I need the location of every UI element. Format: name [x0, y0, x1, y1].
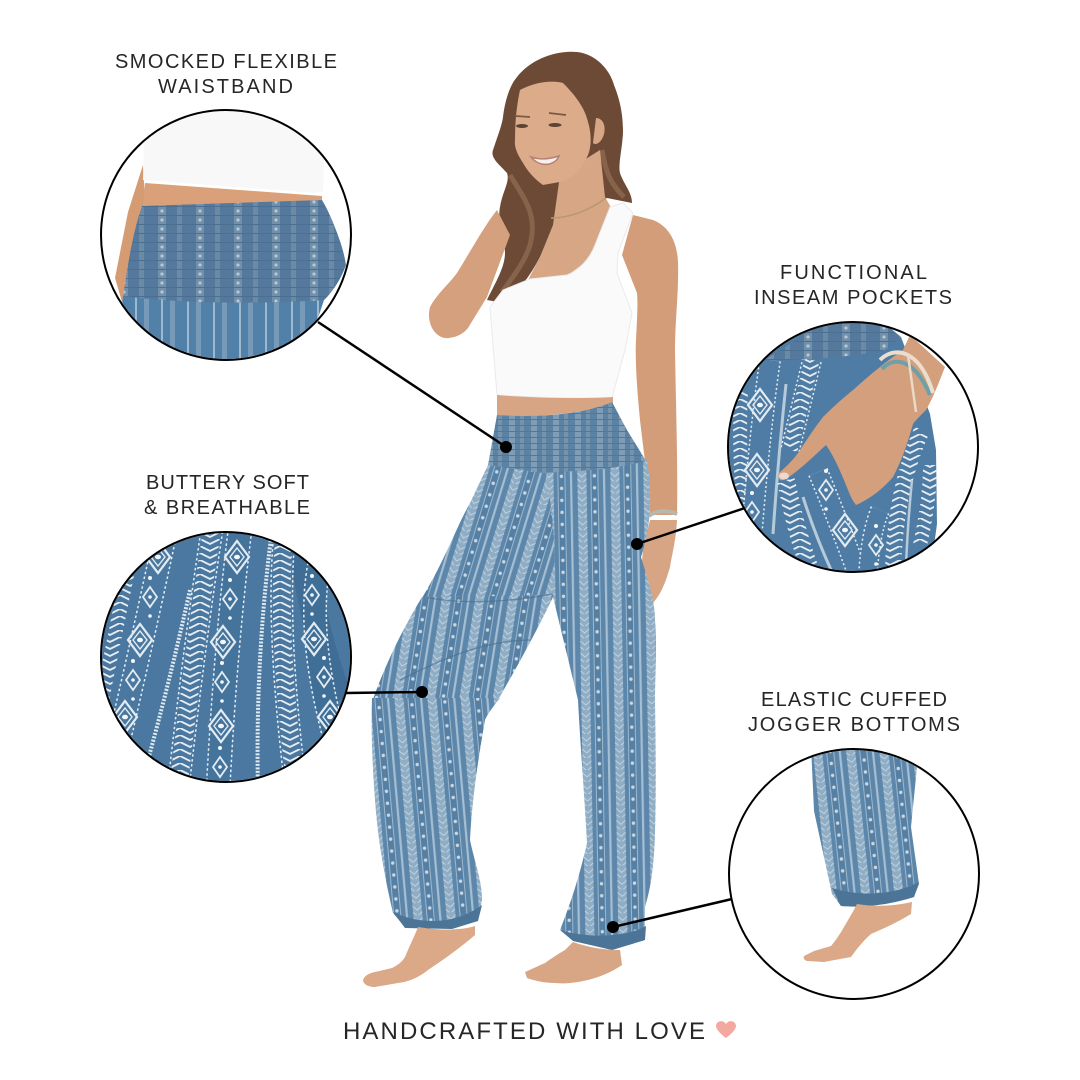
- icon: heart: [716, 1021, 736, 1038]
- fabric: [725, 320, 937, 575]
- heading: waistband: SMOCKED FLEXIBLE: [115, 51, 337, 73]
- leader line: cuffs: [607, 899, 732, 933]
- hand: [778, 335, 945, 505]
- circle: cuff detail: [729, 745, 979, 999]
- circle: pockets detail: [725, 320, 978, 575]
- face: [515, 82, 591, 185]
- forward cuff: [393, 905, 482, 929]
- bracelets: [882, 362, 930, 395]
- cuff: [832, 882, 919, 907]
- white crop top: [143, 167, 144, 180]
- forward knee: [372, 595, 554, 702]
- bracelet: [649, 511, 677, 516]
- smile: [531, 156, 559, 164]
- waistband: [488, 402, 646, 473]
- eyes: [516, 124, 528, 128]
- pant leg: [811, 745, 919, 906]
- leader line: waistband: [318, 322, 512, 453]
- rear foot: [525, 942, 622, 983]
- midriff: [497, 395, 613, 416]
- circle: waistband detail: [101, 105, 351, 365]
- fold shading: [400, 594, 553, 680]
- heading: cuffs: ELASTIC CUFFED: [761, 689, 947, 711]
- brows: [515, 113, 566, 117]
- white top: [490, 203, 633, 398]
- leader line: fabric: [346, 686, 428, 698]
- pocket stripes: [740, 360, 930, 575]
- heading: pockets: [754, 262, 952, 309]
- shadow folds: [300, 530, 340, 700]
- forward shin: [372, 698, 500, 928]
- fabric stripes: [102, 530, 342, 790]
- arm: [115, 165, 145, 302]
- gathered waist: [765, 320, 901, 360]
- heading: cuffs: [748, 689, 960, 736]
- ear: [593, 118, 605, 144]
- heading: pockets: INSEAM POCKETS: [754, 287, 952, 309]
- necklace: [551, 198, 606, 218]
- model figure: [363, 52, 678, 987]
- heading: waistband: [115, 51, 337, 98]
- heading: fabric: BUTTERY SOFT: [146, 472, 309, 494]
- heading: pockets: FUNCTIONAL: [780, 262, 927, 284]
- bare waist: [143, 183, 322, 207]
- heading: fabric: & BREATHABLE: [144, 497, 310, 519]
- pleats: [120, 296, 324, 365]
- hair highlights: [502, 150, 624, 292]
- heading: waistband: WAISTBAND: [158, 76, 293, 98]
- forward foot: [363, 926, 475, 987]
- heading: fabric: [144, 472, 310, 519]
- foot: [804, 902, 912, 962]
- forward thigh: [422, 465, 555, 598]
- fingernail: [779, 472, 789, 480]
- smocked band: [123, 200, 346, 303]
- circle: fabric detail: [100, 530, 354, 790]
- rear cuff: [560, 926, 646, 950]
- neck and chest: [528, 150, 612, 280]
- raised arm: [429, 210, 510, 338]
- footer: handcrafted with love: HANDCRAFTED WITH LOVE: [343, 1018, 705, 1045]
- hair back: [487, 52, 632, 303]
- right arm: [622, 215, 678, 515]
- hand: [640, 520, 677, 620]
- heading: cuffs: JOGGER BOTTOMS: [748, 714, 960, 736]
- leader line: pockets: [631, 508, 745, 550]
- rear leg pants: [520, 460, 656, 950]
